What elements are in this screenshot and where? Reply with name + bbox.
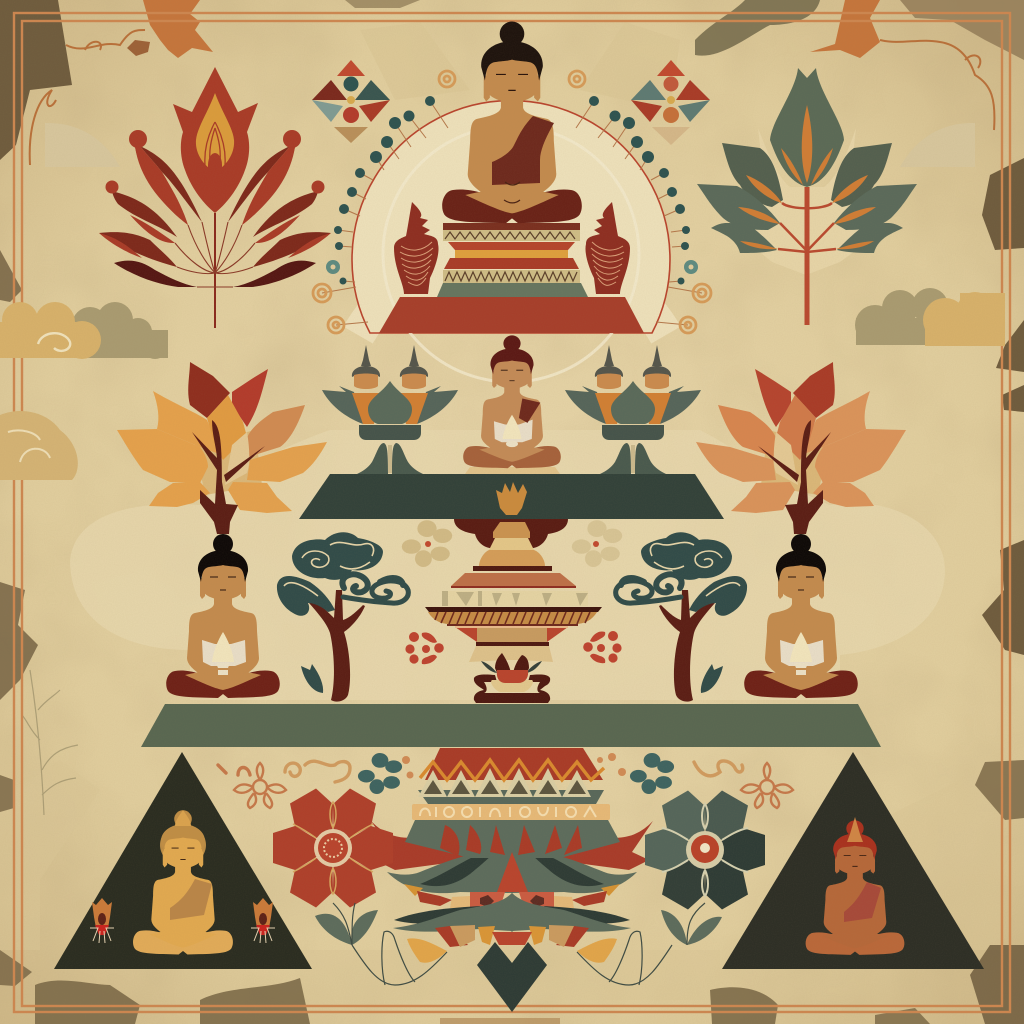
red cone [425,748,603,780]
wide grey green tier [141,704,881,747]
arch dots left [313,71,455,333]
left figure lotus [202,632,246,675]
right figure lotus [780,632,824,675]
ornament middle peak [494,893,530,932]
clouds [0,288,1005,480]
arch dots right [569,71,711,333]
middle Buddha [463,335,561,474]
usnisha [175,810,191,826]
pale flowers [402,520,622,567]
central flame petal [173,67,258,213]
central stupa [425,482,602,703]
ornament diamond [477,942,547,1012]
top left lotus [99,67,331,328]
ornamental diamond left [312,60,390,143]
left grey cloud [72,302,168,359]
sash [492,116,554,185]
right red Buddha [806,817,904,955]
lotus right leaves [215,130,331,287]
lotus left leaves [99,130,215,287]
leaf right side [811,143,917,253]
middle chest and sash [494,399,540,447]
top right leaf [697,68,917,325]
hands [504,182,520,203]
pale fan top left [45,123,120,167]
left red flower [273,785,393,911]
middle pedestal strip [465,467,560,474]
dark flower centre [662,804,748,896]
leaf left side [697,143,803,253]
top pedestal [379,223,644,333]
red rosettes [405,631,622,664]
green crown petal [770,68,844,187]
right orange flower [741,763,793,808]
corner maple leaves [127,0,880,58]
faint plant lower left [22,670,78,815]
zigzag band [418,790,604,804]
left gold cloud [0,302,101,359]
flower stems and leaves [315,903,722,945]
ornament lower half right and left [352,821,672,985]
flame right [251,898,275,943]
vase right [585,202,630,294]
red sash [844,882,881,922]
orange veins [802,105,812,183]
corner flourishes [30,30,994,165]
green under band [405,820,620,858]
left autumn tree [117,362,327,534]
rosette right [583,631,622,663]
ornamental diamond right [631,60,710,145]
golden sash [170,879,212,920]
pale cloud behind the tiers [70,430,945,700]
left deity lotus [322,345,458,474]
inscription band [412,804,610,820]
lower centre piece [492,932,532,945]
left mid cloud [0,411,78,480]
right grey cloud [855,288,950,345]
right deity lotus [565,345,701,474]
top Buddha [442,22,582,223]
right gold cloud [923,292,1005,346]
right dark flower [645,787,765,913]
top vases [394,202,630,294]
left swirl tree [277,532,408,702]
left golden Buddha [133,810,233,955]
lower strip [0,760,1000,1000]
right autumn tree [696,362,906,534]
right swirl tree [616,532,747,702]
pale fan top right [900,123,975,167]
right triangle panel [722,752,984,969]
spire [847,817,863,842]
ornament centre triangle [497,852,528,892]
inner flame [196,93,234,172]
small ornaments under the tier [218,753,793,808]
left seated figure [166,534,280,698]
dark green tier [299,474,724,519]
left triangle panel [54,752,312,969]
bottom centre ornament [352,748,672,1012]
left triangle flames [90,898,275,943]
red stem and branches [778,187,836,325]
halo arch [313,71,711,382]
right seated figure [744,534,858,698]
red flower centre [293,802,373,894]
stupa base lotus [474,653,550,703]
pale shapes near the top [360,22,680,110]
left orange flower [234,763,286,808]
